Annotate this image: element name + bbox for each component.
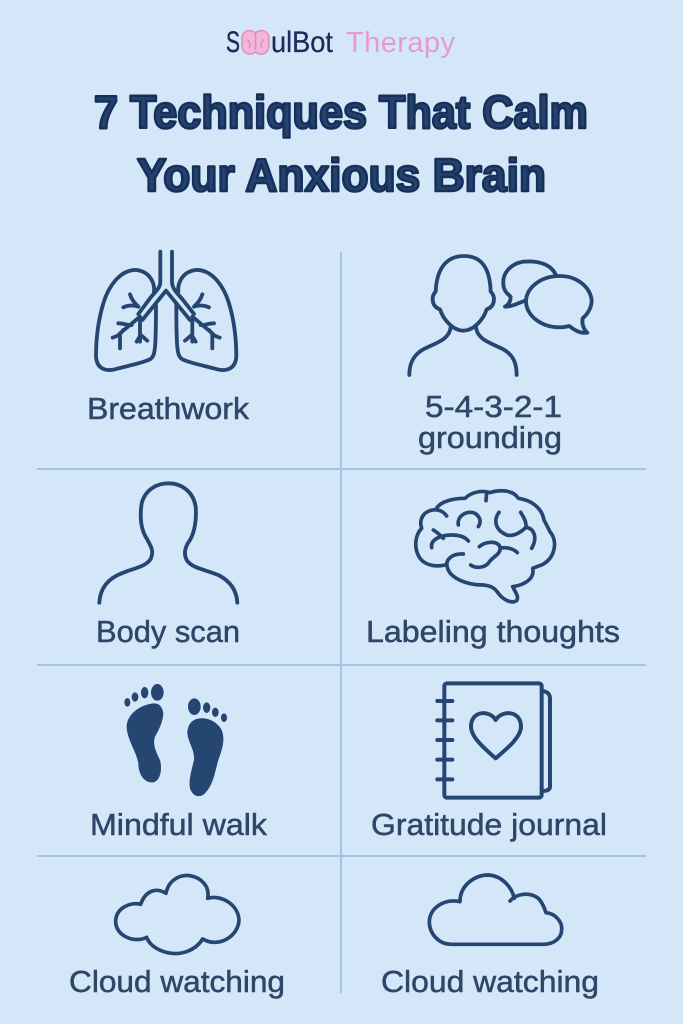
panel: cloud watching left — [69, 875, 285, 999]
title: Your Anxious Brain — [137, 149, 546, 201]
panel: 5-4-3-2-1 grounding: grounding — [418, 421, 562, 455]
logo: S — [226, 26, 240, 59]
icon: puffy cloud — [116, 875, 239, 954]
icon: person with speech bubbles — [409, 256, 592, 375]
panel: body scan — [96, 483, 240, 649]
panel: breathwork — [87, 252, 250, 426]
panel: labeling thoughts — [366, 491, 620, 649]
icon: brain — [416, 491, 555, 602]
label: Cloud watching — [69, 965, 285, 999]
icon: journal with heart — [437, 683, 550, 798]
icon: footprints — [124, 684, 227, 796]
logo — [226, 26, 456, 59]
logo: ulBot — [271, 26, 334, 59]
icon: lungs — [96, 252, 236, 370]
icon: pink brain logo — [242, 31, 269, 54]
logo: Therapy — [346, 27, 456, 59]
panel: gratitude journal — [371, 683, 607, 842]
panel: 5-4-3-2-1 grounding — [409, 256, 592, 455]
panel: mindful walk — [90, 684, 268, 842]
icon: flat cloud — [429, 875, 562, 944]
panel: cloud watching right — [381, 875, 599, 999]
label: Body scan — [96, 615, 240, 649]
label: Cloud watching — [381, 965, 599, 999]
label: Mindful walk — [90, 808, 268, 842]
title — [94, 86, 588, 201]
label: Labeling thoughts — [366, 615, 620, 649]
label: 5-4-3-2-1 — [425, 390, 562, 424]
label: Breathwork — [87, 392, 250, 426]
label: Gratitude journal — [371, 808, 607, 842]
title: 7 Techniques That Calm — [94, 86, 588, 138]
icon: person silhouette — [99, 483, 237, 603]
